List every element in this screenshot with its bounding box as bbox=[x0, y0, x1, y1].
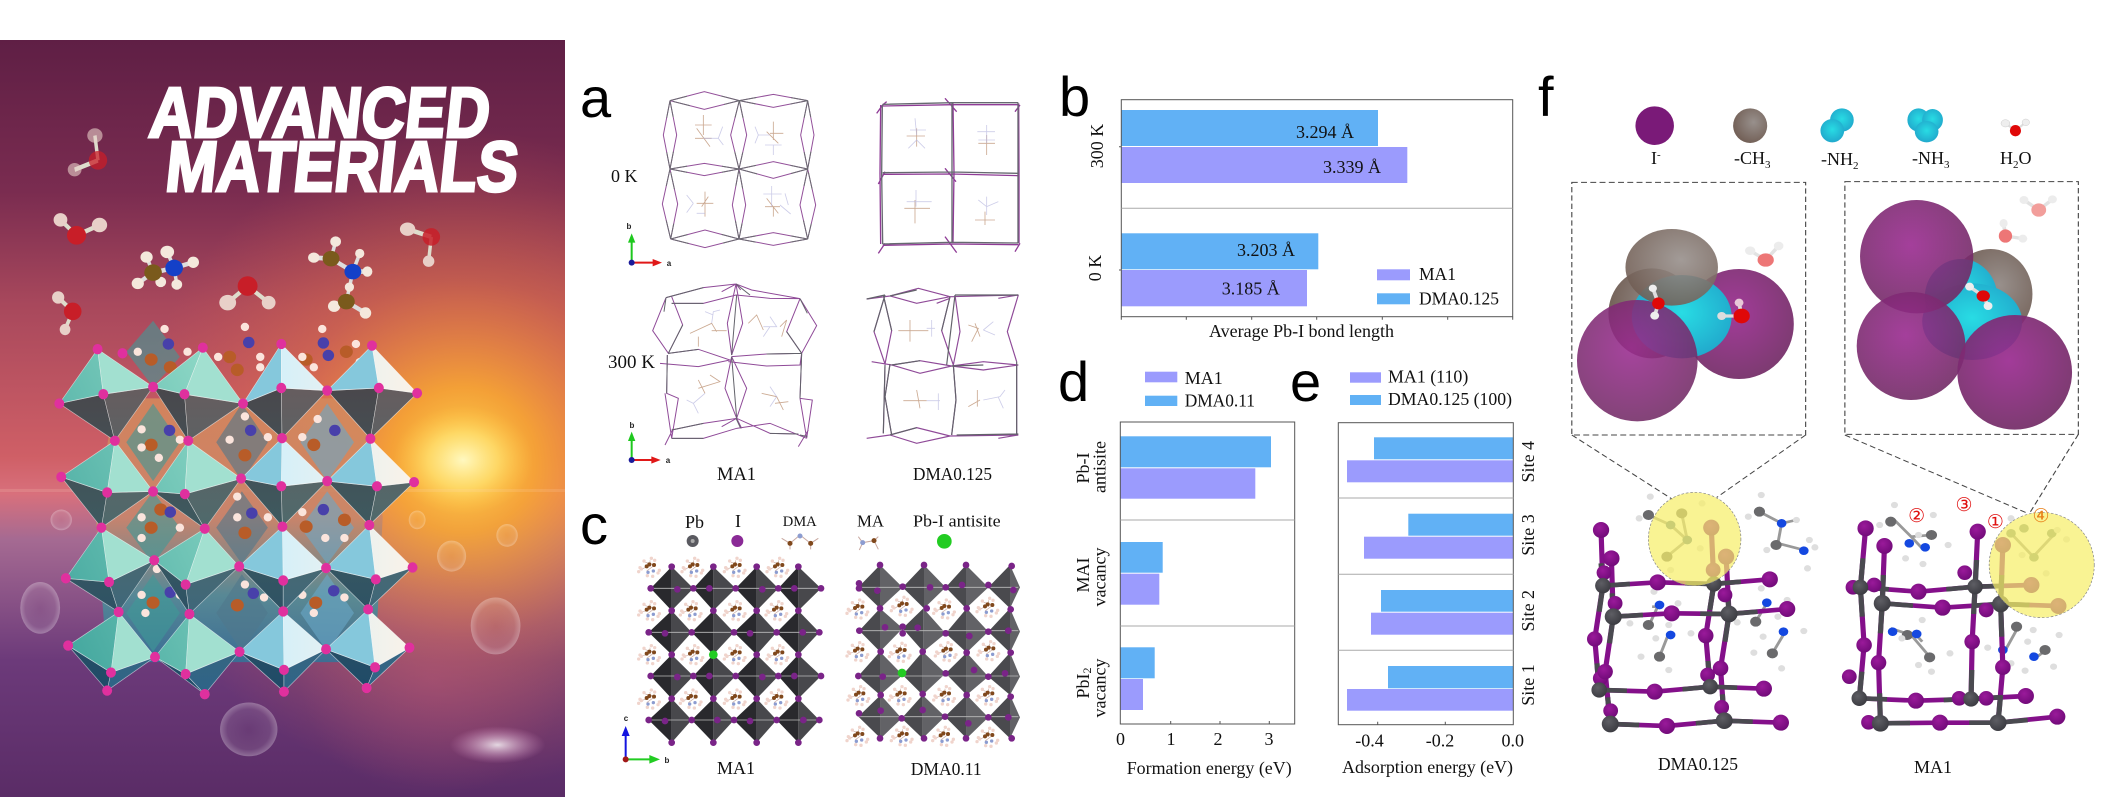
panel c labels: c bbox=[624, 714, 629, 723]
chart d: formation energy bbox=[1073, 368, 1295, 779]
y labels d: antisite bbox=[1090, 441, 1110, 493]
panel c labels bbox=[624, 511, 1001, 779]
iodine atoms DMA0.11 bbox=[858, 565, 1013, 738]
site number markers: ③ bbox=[1955, 494, 1973, 516]
value labels: 3.294 Å bbox=[1296, 122, 1354, 142]
panel a labels: a bbox=[667, 259, 672, 268]
value labels bbox=[1222, 122, 1381, 298]
y labels d: PbI bbox=[1073, 673, 1093, 699]
interlayer backing bbox=[96, 398, 383, 662]
dashed callouts bbox=[1572, 182, 2078, 513]
panel c labels: MA bbox=[857, 512, 885, 531]
panel f legend labels bbox=[1651, 148, 2032, 172]
organic cations between octahedra bbox=[134, 323, 364, 617]
chart e: adsorption energy bbox=[1338, 366, 1538, 778]
panel letter a: a bbox=[580, 66, 612, 129]
lead left bbox=[1591, 576, 1738, 732]
droplets bbox=[20, 510, 545, 764]
legend spheres bbox=[1635, 106, 2030, 145]
axis 300 K bbox=[628, 432, 661, 464]
frame MA1 0 K bbox=[662, 92, 816, 248]
panel f legend labels: O bbox=[2018, 148, 2032, 168]
legend atoms c bbox=[687, 534, 952, 550]
bars e bbox=[1347, 437, 1513, 711]
panel f legend labels: 2 bbox=[1853, 160, 1858, 172]
panel a labels: DMA0.125 bbox=[913, 464, 992, 484]
antisite atom MA1 bbox=[709, 650, 718, 659]
site labels: Site 1 bbox=[1518, 664, 1538, 706]
organic cations left bbox=[1630, 495, 1815, 670]
bars b bbox=[1121, 110, 1407, 306]
iodine left bbox=[1587, 520, 1795, 734]
tick labels e: -0.4 bbox=[1355, 731, 1384, 751]
y labels d: MAI bbox=[1073, 557, 1093, 592]
legend b bbox=[1377, 264, 1499, 308]
molecules DMA0.11 bbox=[847, 597, 999, 746]
value labels: 3.185 Å bbox=[1222, 278, 1280, 298]
panel a labels: b bbox=[630, 421, 635, 430]
blue octahedra bbox=[239, 344, 417, 692]
bars d bbox=[1120, 436, 1271, 710]
y labels d bbox=[1073, 441, 1110, 717]
journal cover panel bbox=[0, 40, 565, 797]
panel letter e: e bbox=[1290, 350, 1321, 413]
axis labels b: Average Pb-I bond length bbox=[1209, 321, 1394, 341]
legend b: DMA0.125 bbox=[1419, 288, 1499, 308]
antisite atom DMA0.11 bbox=[898, 669, 906, 677]
tick labels d bbox=[1116, 729, 1274, 749]
cover title: Advanced Materials: MATERIALS bbox=[162, 128, 523, 207]
axis labels b bbox=[1085, 124, 1394, 341]
site labels: Site 4 bbox=[1518, 441, 1538, 482]
site number markers bbox=[1908, 494, 2050, 533]
cover illustration: crystal, molecules and droplets bbox=[20, 128, 545, 764]
panel a labels: b bbox=[627, 222, 632, 231]
tick labels e bbox=[1355, 731, 1524, 751]
panel f legend labels: -CH bbox=[1734, 148, 1765, 168]
legend b: MA1 bbox=[1419, 264, 1456, 284]
cover title: Advanced Materials: ADVANCED bbox=[146, 74, 494, 153]
panel c labels: DMA0.11 bbox=[911, 759, 982, 779]
panel f legend labels: - bbox=[1657, 149, 1661, 161]
site number markers: ① bbox=[1987, 511, 2004, 533]
panel c labels: b bbox=[665, 756, 670, 765]
panel letter d: d bbox=[1058, 350, 1089, 413]
cover background bbox=[0, 40, 565, 797]
frame b bbox=[1119, 100, 1513, 320]
panel c labels: Pb bbox=[685, 512, 704, 532]
panel f: binding sites bbox=[1572, 106, 2094, 734]
octahedra MA1 bbox=[649, 567, 821, 743]
site labels: Site 2 bbox=[1518, 590, 1538, 631]
organic cations right bbox=[1880, 505, 2067, 672]
panel f legend labels: I bbox=[1651, 148, 1657, 168]
frame e bbox=[1338, 423, 1513, 725]
frame DMA0.125 0 K bbox=[877, 98, 1020, 253]
teal octahedra bbox=[59, 348, 243, 694]
yellow highlight left bbox=[1648, 492, 1741, 586]
spheres DMA0.125 bbox=[1577, 229, 1794, 421]
legend d bbox=[1145, 368, 1255, 411]
site number markers: ④ bbox=[2032, 505, 2050, 527]
tick labels d: 0 bbox=[1116, 729, 1125, 749]
panel c: structures bbox=[622, 534, 1020, 764]
panel c labels: DMA bbox=[783, 514, 817, 530]
panel c labels: MA1 bbox=[717, 758, 755, 778]
spheres MA1 bbox=[1857, 195, 2072, 430]
back octahedra bbox=[126, 321, 354, 652]
value labels: 3.339 Å bbox=[1323, 157, 1381, 177]
panel c labels: Pb-I antisite bbox=[913, 511, 1001, 530]
panel letter f: f bbox=[1538, 65, 1554, 128]
y labels d: Pb-I bbox=[1073, 452, 1093, 484]
axis c bbox=[622, 726, 660, 764]
axis labels b: 300 K bbox=[1087, 124, 1107, 168]
legend d: DMA0.11 bbox=[1185, 391, 1255, 411]
y labels d: vacancy bbox=[1090, 548, 1110, 606]
site labels: Site 3 bbox=[1518, 514, 1538, 556]
value labels: 3.203 Å bbox=[1237, 240, 1295, 260]
iodine atoms MA1 bbox=[649, 567, 821, 743]
panel letter b: b bbox=[1059, 65, 1090, 128]
legend e: DMA0.125 (100) bbox=[1388, 389, 1512, 410]
site number markers: ② bbox=[1908, 505, 1925, 527]
site labels bbox=[1518, 441, 1538, 706]
yellow highlight right bbox=[1989, 512, 2094, 618]
DMA molecule bbox=[308, 236, 372, 319]
lead right bbox=[1852, 579, 2009, 732]
panel a labels: MA1 bbox=[717, 465, 756, 485]
x label e: Adsorption energy (eV) bbox=[1342, 757, 1513, 778]
tick labels e: 0.0 bbox=[1501, 731, 1524, 751]
panel a labels: 0 K bbox=[611, 166, 638, 186]
tick labels d: 1 bbox=[1166, 729, 1176, 749]
legend d: MA1 bbox=[1185, 368, 1223, 388]
MA molecule bbox=[132, 246, 199, 290]
molecules MA1 bbox=[639, 558, 788, 708]
panel f legend labels: -NH bbox=[1912, 148, 1944, 168]
x label d: Formation energy (eV) bbox=[1127, 758, 1292, 779]
water molecules floating bbox=[52, 128, 440, 335]
cover title: Advanced Materials bbox=[140, 74, 528, 207]
panel f legend labels: 3 bbox=[1944, 159, 1950, 171]
axis labels b: 0 K bbox=[1085, 255, 1105, 281]
bonds right bbox=[1859, 528, 2058, 723]
y labels d: vacancy bbox=[1090, 659, 1110, 717]
tick labels d: 3 bbox=[1264, 729, 1274, 749]
frame DMA0.125 300 K bbox=[867, 288, 1018, 443]
legend e: MA1 (110) bbox=[1388, 366, 1468, 387]
tick labels e: -0.2 bbox=[1426, 731, 1454, 751]
panel f structure labels bbox=[1658, 754, 1952, 777]
panel f structure labels: DMA0.125 bbox=[1658, 754, 1738, 774]
y labels d: 2 bbox=[1080, 667, 1094, 673]
bonds left bbox=[1595, 528, 1787, 726]
panel letter c: c bbox=[580, 493, 608, 556]
frame d bbox=[1120, 422, 1295, 724]
chart b: average Pb-I bond length bbox=[1085, 100, 1513, 341]
panel f legend labels: 2 bbox=[2013, 159, 2018, 171]
octahedra DMA0.11 bbox=[858, 565, 1020, 738]
panel a labels bbox=[608, 166, 992, 485]
ball-and-stick DMA0.125 bbox=[1587, 492, 2094, 734]
frame MA1 300 K bbox=[653, 284, 817, 447]
iodine atoms on crystal bbox=[54, 339, 422, 699]
iodine right bbox=[1842, 520, 2066, 731]
panel f legend labels: 3 bbox=[1765, 159, 1771, 171]
tick labels d: 2 bbox=[1214, 729, 1222, 749]
legend e bbox=[1350, 366, 1512, 410]
panel a: crystal frames bbox=[628, 92, 1020, 464]
panel a labels: 300 K bbox=[608, 352, 655, 373]
panel c labels: I bbox=[735, 511, 741, 531]
axis 0 K bbox=[628, 233, 662, 266]
panel f legend labels: H bbox=[2000, 148, 2013, 168]
panel a labels: a bbox=[666, 456, 671, 465]
panel f legend labels: -NH bbox=[1821, 149, 1853, 169]
panel f structure labels: MA1 bbox=[1914, 757, 1952, 777]
